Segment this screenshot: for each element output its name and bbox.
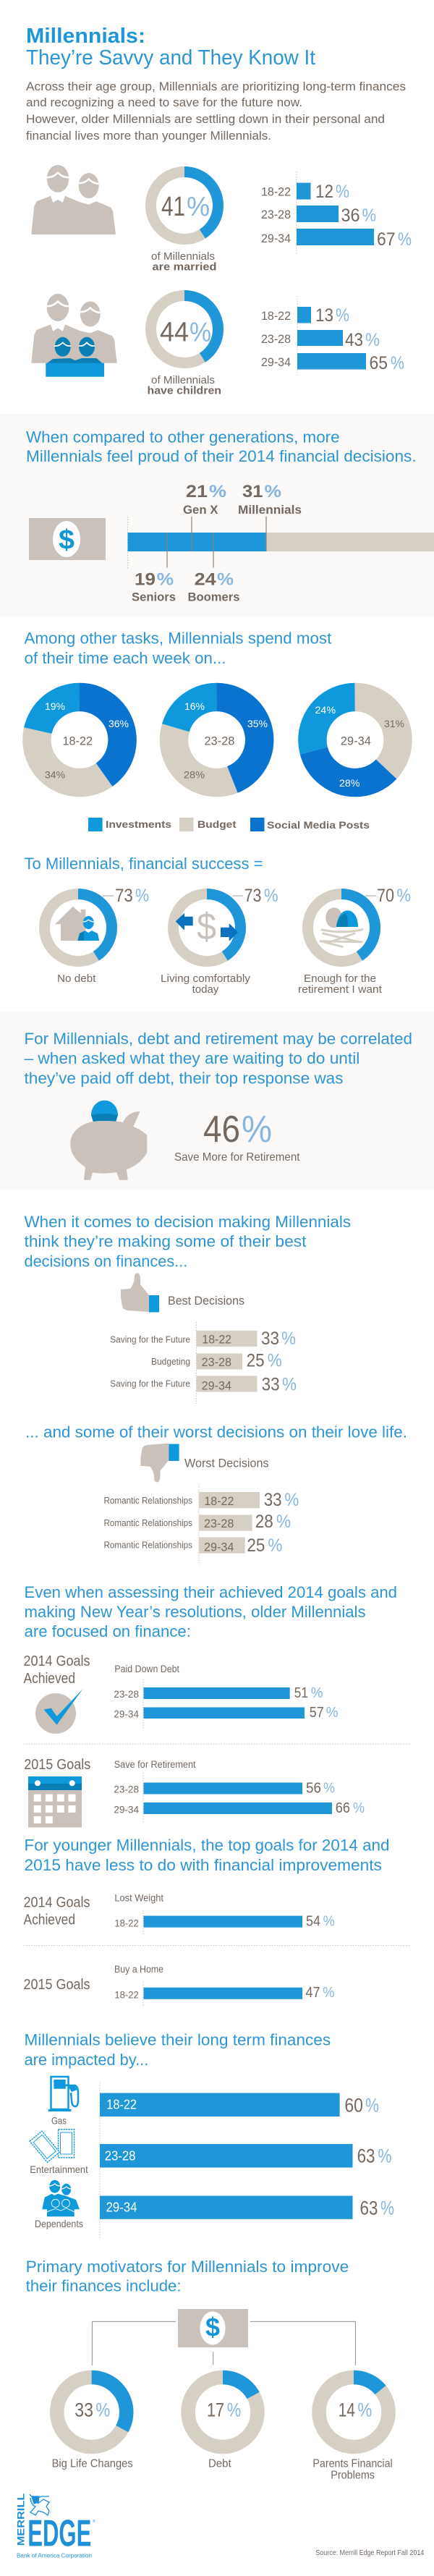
icon: dollar and arrows: $ [197,906,216,948]
bar chart: married by age: % [398,229,412,250]
title [26,25,315,69]
bar chart: children by age: 29-34 [261,355,291,369]
bar chart: married by age: 18-22 [261,185,291,198]
generation labels: % [265,482,281,501]
donut: no debt: % [135,886,149,906]
donut: parents financial problems: % [357,2399,372,2421]
bar chart: children by age: % [391,353,404,373]
bar chart: children by age: 23-28 [261,332,291,346]
bar chart: married by age: % [336,182,349,202]
donut: parents financial problems: Problems [331,2470,375,2482]
bar chart: best decisions: Budgeting [151,1356,190,1367]
icon: couple [31,165,116,234]
icon: dollar bill: $ [59,525,75,556]
title: Millennials: [26,25,145,48]
donut: debt: % [227,2399,241,2421]
icon: dependents [42,2180,80,2216]
heading: older millennials goals [25,1583,397,1640]
bar chart: worst decisions: 25 [247,1535,265,1556]
bar chart: best decisions: % [281,1329,296,1349]
donut chart: 29-34: 29-34 [341,734,371,747]
bar chart: paid down debt [114,1664,339,1729]
icon: dollar bill motivators [178,2309,248,2347]
generation labels: Boomers [188,590,240,603]
donut: living comfortably: 73 [244,886,262,906]
logo: Merrill Edge: EDGE [27,2512,91,2554]
donut: debt: Debt [208,2458,231,2470]
bar chart: children by age: 13 [315,305,333,326]
heading: proud: When compared to other generations, more [26,428,340,446]
heading: motivators: Primary motivators for Millennials to improve [26,2258,349,2276]
donut: parents financial problems: 14 [339,2399,355,2421]
heading: long term finances [25,2031,331,2069]
bar chart: save for retirement: 23-28 [114,1784,139,1795]
bar chart: impact on finances: % [378,2145,392,2167]
bar chart: married by age: 29-34 [261,232,291,245]
generation labels: Seniors [132,590,176,603]
icon: calendar [28,1776,82,1828]
label: younger 2015 goals: 2015 Goals [23,1977,90,1993]
bar chart: worst decisions: 18-22 [204,1494,234,1508]
intro text: financial lives more than younger Millennials. [26,129,271,143]
donut chart: 23-28: 16% [184,700,205,712]
generation labels: 21 [186,482,208,501]
bar chart: impact on finances: 18-22 [106,2098,137,2112]
heading: debt and retirement: – when asked what they are waiting to do until [25,1049,359,1067]
heading: older millennials goals: Even when assessing their achieved 2014 goals and [25,1583,397,1601]
donut: big life changes: Big Life Changes [52,2458,133,2470]
bar chart: impact on finances: 29-34 [106,2200,137,2214]
generation labels: Millennials [238,503,302,517]
title: They’re Savvy and They Know It [26,46,315,69]
bar chart: children by age: % [365,330,380,350]
generation labels: % [157,570,174,590]
legend: Investments [106,818,171,830]
donut: children 44%: 44 [160,317,189,347]
intro text: However, older Millennials are settling down in their personal and [26,112,385,126]
bar chart: married by age [261,171,412,253]
bar chart: best decisions: Saving for the Future [110,1378,190,1389]
donut: married 41%: 41 [161,192,185,222]
heading: motivators [26,2258,349,2295]
bar chart: lost weight [114,1892,335,1935]
heading: debt and retirement: they’ve paid off debt, their top response was [25,1069,343,1087]
donut: married 41%: % [187,192,210,222]
heading: best decisions: decisions on finances... [25,1252,187,1270]
bar chart: impact on finances: % [365,2095,379,2117]
donut chart: 18-22: 18-22 [62,734,93,747]
heading: proud [26,428,417,465]
bar chart: worst decisions: Romantic Relationships [104,1517,192,1528]
caption: married: are married [152,260,217,274]
donut: living comfortably: Living comfortably [161,973,251,985]
bar chart: impact on finances [100,2083,394,2240]
donut chart: 23-28: 35% [247,718,268,729]
heading: long term finances: are impacted by... [25,2051,148,2069]
heading: best decisions: When it comes to decision making Millennials [25,1213,351,1231]
donut: enough for retirement [298,886,411,996]
bar chart: worst decisions: Romantic Relationships [104,1495,192,1506]
bar chart: save for retirement: 29-34 [114,1804,139,1816]
donut chart: 23-28: 23-28 [204,734,234,747]
label: younger 2014 goals achieved: 2014 Goals [23,1894,90,1910]
caption: married [151,250,217,274]
heading: long term finances: Millennials believe their long term finances [25,2031,331,2049]
icon: dollar bill motivators: $ [205,2313,220,2342]
donut: big life changes: % [95,2399,110,2421]
donut: enough for retirement: % [396,886,411,906]
bar chart: children by age: 65 [369,353,388,373]
bar chart: married by age: % [362,206,376,226]
icon: check mark [35,1689,83,1734]
icon: family [31,294,117,377]
panel: proud of decisions [0,414,434,617]
caption: children: have children [148,385,221,397]
icon: piggy bank [70,1101,147,1180]
bar chart: best decisions: Saving for the Future [110,1334,190,1344]
bar chart: best decisions: 33 [261,1329,279,1349]
bar chart: impact on finances: 60 [344,2095,363,2117]
logo: Merrill Edge: ® [93,2519,95,2524]
bar chart: lost weight: 18-22 [114,1918,139,1929]
donut chart: 18-22 [37,697,129,783]
bar chart: best decisions: 23-28 [202,1355,231,1369]
heading: younger millennials goals: For younger Millennials, the top goals for 2014 and [25,1836,389,1855]
donut: married 41% [150,172,218,239]
generation labels: 31 [242,482,263,501]
bar chart: lost weight: 54 [306,1913,320,1929]
caption: children [148,374,221,397]
heading: tasks: of their time each week on... [25,649,226,667]
bar chart: paid down debt: 29-34 [114,1708,139,1719]
donut chart: 29-34 [312,697,404,789]
caption: married: of Millennials [151,250,215,263]
bar chart: worst decisions: 33 [264,1490,282,1510]
icon: house and person [55,907,99,941]
legend: Budget [197,818,237,830]
label: 2014 goals achieved: Achieved [23,1671,75,1687]
label: 2014 goals achieved: 2014 Goals [23,1653,90,1669]
donut: enough for retirement: 70 [377,886,394,906]
source note: Source: Merrill Edge Report Fall 2014 [315,2549,425,2557]
bar chart: worst decisions: % [276,1512,291,1532]
donut: no debt: 73 [115,886,133,906]
bar chart: lost weight: Lost Weight [114,1892,163,1903]
stat: 46%: Save More for Retirement [174,1151,300,1164]
intro text [26,80,406,143]
bar chart: paid down debt: Paid Down Debt [114,1664,179,1674]
bar chart: impact on finances: 63 [357,2145,375,2167]
donut chart: 29-34: 28% [339,777,360,789]
bar chart: best decisions: % [282,1374,297,1394]
donut chart: 29-34: 31% [384,718,404,729]
donut: no debt: No debt [57,973,96,985]
icon: nest eggs [320,907,362,946]
bar chart: best decisions: 29-34 [202,1379,231,1392]
stat: 46% [174,1109,300,1164]
bar chart: married by age: 12 [315,182,333,202]
bar chart: paid down debt: % [311,1685,323,1701]
generation labels: % [217,570,234,590]
bar chart: worst decisions [104,1484,299,1564]
bar chart: children by age: 18-22 [261,309,291,323]
donut: enough for retirement: Enough for the [304,973,376,985]
donut: children 44%: % [190,317,211,347]
label: younger 2014 goals achieved [23,1894,90,1928]
donut chart: 18-22: 19% [45,700,65,712]
stat: 46%: % [242,1109,272,1151]
icon: thumbs up [121,1273,159,1313]
icon: dollar and arrows [176,906,238,948]
label: dependents: Dependents [35,2218,83,2229]
bar: generations comparison [127,517,434,570]
heading: worst decisions: ... and some of their worst decisions on their love life. [25,1423,407,1441]
donut: debt [188,2378,258,2470]
legend: Social Media Posts [267,819,370,831]
bar chart: best decisions: 33 [262,1374,280,1394]
generation labels: 19 [135,570,156,590]
donut: debt: 17 [207,2399,224,2421]
donut: children 44% [150,295,218,363]
heading: older millennials goals: making New Year’s resolutions, older Millennials [25,1603,365,1621]
label: worst decisions: Worst Decisions [184,1457,269,1470]
heading: best decisions: think they’re making some of their best [25,1232,307,1250]
bar chart: worst decisions: 23-28 [204,1517,234,1530]
bar chart: children by age: % [336,305,349,326]
stat: 46%: 46 [203,1109,240,1151]
bar chart: paid down debt: % [326,1705,339,1721]
bar chart: best decisions: % [268,1350,282,1370]
logo: Merrill Edge [14,2493,95,2559]
connector lines [92,2321,355,2365]
bar chart: save for retirement: 56 [306,1780,321,1796]
icon: thumbs down [140,1444,179,1482]
donut chart: 18-22: 34% [45,769,65,781]
heading: younger millennials goals: 2015 have less to do with financial improvements [25,1856,382,1874]
bar chart: save for retirement: % [353,1800,365,1816]
icon: tickets [30,2130,74,2162]
heading: debt and retirement [25,1030,412,1087]
bar chart: buy a home [114,1964,334,2007]
bar chart: save for retirement [114,1759,365,1823]
generation labels: 24 [195,570,216,590]
donut: living comfortably: % [264,886,278,906]
logo: Merrill Edge: MERRILL [14,2493,26,2546]
generation labels: Gen X [183,503,218,517]
bar chart: buy a home: Buy a Home [114,1964,163,1975]
generation labels: % [209,482,226,501]
heading: motivators: their finances include: [26,2277,182,2295]
donut: big life changes [52,2378,133,2470]
intro text: and recognizing a need to save for the future now. [26,96,302,109]
bar chart: buy a home: 47 [305,1985,320,2001]
bar chart: best decisions: 25 [247,1350,265,1370]
label: younger 2014 goals achieved: Achieved [23,1912,75,1928]
heading: best decisions [25,1213,351,1270]
bar chart: worst decisions: 29-34 [204,1540,234,1554]
bar chart: impact on finances: % [380,2198,394,2219]
bar chart: paid down debt: 51 [294,1685,308,1701]
label: entertainment: Entertainment [30,2164,88,2175]
panel: debt and retirement [0,1012,434,1190]
icon: dollar bill [29,518,106,560]
caption: children: of Millennials [151,374,215,386]
donut: living comfortably [161,886,278,996]
bar chart: children by age [261,296,404,377]
heading: proud: Millennials feel proud of their 2014 financial decisions. [26,447,417,465]
bar chart: buy a home: % [323,1985,334,2001]
heading: financial success: To Millennials, financial success = [25,855,263,873]
heading: older millennials goals: are focused on finance: [25,1622,191,1640]
bar chart: lost weight: % [323,1913,335,1929]
heading: debt and retirement: For Millennials, debt and retirement may be correlated [25,1030,412,1048]
donut: enough for retirement: retirement I want [298,983,383,996]
bar chart: worst decisions: % [284,1490,299,1510]
heading: younger millennials goals [25,1836,389,1874]
bar chart: worst decisions: % [268,1535,282,1556]
generation labels [132,482,302,603]
icon: gas pump [48,2077,78,2111]
label: 2015 goals: 2015 Goals [24,1757,90,1773]
donut chart: 18-22: 36% [109,718,129,729]
bar chart: worst decisions: Romantic Relationships [104,1539,192,1550]
intro text: Across their age group, Millennials are prioritizing long-term finances [26,80,406,93]
bar chart: save for retirement: % [323,1780,335,1796]
bar chart: buy a home: 18-22 [114,1989,139,2001]
bar chart: paid down debt: 23-28 [114,1688,139,1700]
bar chart: married by age: 36 [341,206,360,226]
legend [88,818,370,831]
label: best decisions: Best Decisions [168,1294,244,1308]
donut: living comfortably: today [192,983,219,996]
donut: big life changes: 33 [75,2399,93,2421]
donut: parents financial problems: Parents Financial [312,2458,393,2470]
bar chart: best decisions [110,1322,297,1404]
bar chart: children by age: 43 [345,330,363,350]
bar chart: married by age: 67 [377,229,395,250]
bar chart: save for retirement: Save for Retirement [114,1759,196,1770]
donut chart: 23-28 [174,697,268,783]
label: gas: Gas [51,2115,67,2127]
icon: bull [30,2494,49,2515]
donut chart: 23-28: 28% [184,769,205,781]
bar chart: save for retirement: 66 [336,1800,350,1816]
bar chart: impact on finances: 23-28 [105,2149,136,2164]
bar chart: married by age: 23-28 [261,208,291,221]
bar chart: worst decisions: 28 [255,1512,273,1532]
donut chart: 29-34: 24% [315,704,336,716]
donut: parents financial problems [312,2378,393,2482]
label: 2014 goals achieved [23,1653,90,1687]
bar chart: paid down debt: 57 [310,1705,324,1721]
heading: tasks: Among other tasks, Millennials spend most [25,630,331,648]
donut: no debt [45,886,149,985]
bar chart: impact on finances: 63 [360,2198,378,2219]
heading: tasks [25,630,331,667]
bar chart: best decisions: 18-22 [202,1333,231,1347]
logo: Merrill Edge: Bank of America Corporation [17,2551,92,2559]
